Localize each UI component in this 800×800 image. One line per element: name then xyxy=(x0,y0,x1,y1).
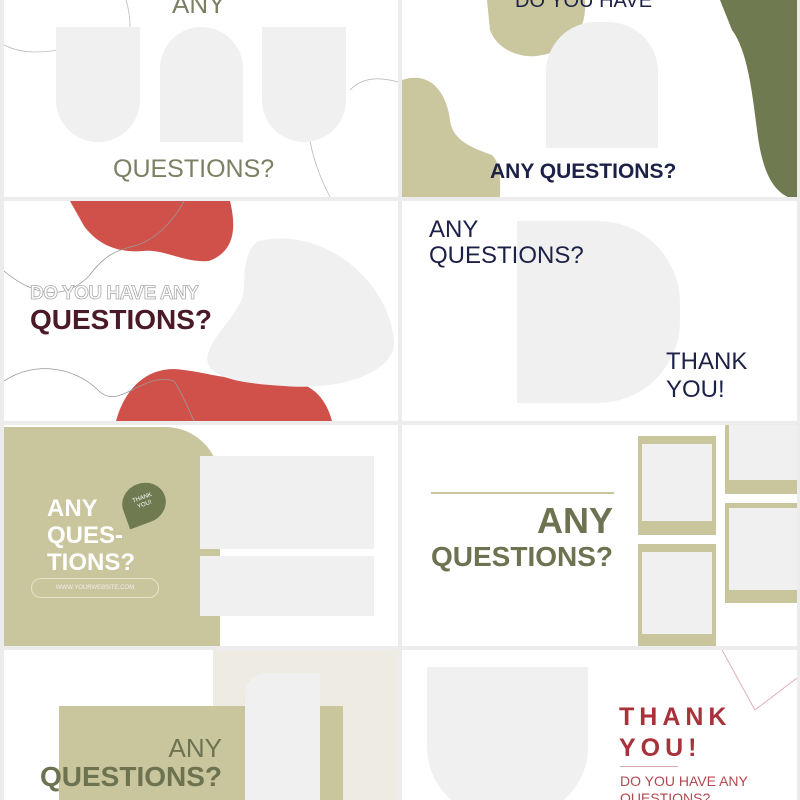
tan block xyxy=(4,427,220,646)
shape: arch xyxy=(245,673,320,800)
blobs xyxy=(402,0,797,197)
badge: THANK YOU!: THANK xyxy=(132,492,153,505)
url pill xyxy=(31,578,159,598)
text: ANY QUESTIONS?: ANY QUESTIONS? xyxy=(490,160,676,183)
panel: slide 8 xyxy=(402,650,797,800)
panel: slide 2 xyxy=(402,0,797,197)
text: THANK YOU!: YOU! xyxy=(619,734,702,762)
shape: left U xyxy=(56,27,140,142)
text: ANY QUESTIONS?: ANY xyxy=(429,216,478,243)
text: ANY: ANY xyxy=(537,500,613,541)
text: THANK YOU! xyxy=(666,348,747,403)
panel: slide 4 xyxy=(402,201,797,421)
text: ANY QUES-TIONS?: TIONS? xyxy=(47,549,135,576)
badge: THANK YOU!: YOU! xyxy=(137,500,153,510)
text: THANK YOU!: THANK xyxy=(619,703,732,731)
panel: slide 5 xyxy=(4,425,398,646)
panel: slide 7 xyxy=(4,650,398,800)
text: DO YOU HAVE ANY QUESTIONS? xyxy=(620,773,748,800)
shape: middle arch xyxy=(160,27,243,142)
photo placeholders xyxy=(200,456,374,549)
badge: THANK YOU! xyxy=(116,477,172,529)
shape: D xyxy=(517,221,680,403)
frames xyxy=(638,436,716,535)
panel: slide 1 xyxy=(4,0,398,197)
text: DO YOU HAVE ANY QUESTIONS?: DO YOU HAVE ANY xyxy=(620,773,748,789)
text: QUESTIONS?: QUESTIONS? xyxy=(30,304,212,335)
divider with dots xyxy=(431,492,614,494)
shape: arch xyxy=(546,22,658,148)
decorative curves xyxy=(4,0,398,197)
text: ANY QUES-TIONS?: QUES- xyxy=(47,522,123,549)
text: QUESTIONS?: QUESTIONS? xyxy=(40,761,222,792)
text: THANK YOU!: THANK xyxy=(666,348,747,375)
panel: slide 3 xyxy=(4,201,398,421)
text: ANY QUES-TIONS? xyxy=(47,495,135,576)
shape: right U xyxy=(262,27,346,142)
text: THANK YOU!: YOU! xyxy=(666,376,725,403)
blobs xyxy=(4,201,394,421)
text: ANY QUESTIONS?: QUESTIONS? xyxy=(429,242,584,269)
text: ANY QUESTIONS? xyxy=(429,216,584,269)
text: QUESTIONS?: QUESTIONS? xyxy=(113,155,274,183)
text: QUESTIONS?: QUESTIONS? xyxy=(431,541,613,572)
shape: U xyxy=(427,667,588,800)
text: ANY: ANY xyxy=(169,733,222,763)
text: THANK YOU! xyxy=(619,703,732,762)
text: ANY QUES-TIONS?: ANY xyxy=(47,495,98,522)
url pill: WWW.YOURWEBSITE.COM xyxy=(56,585,134,591)
panel: slide 6 xyxy=(402,425,797,646)
text: DO YOU HAVE ANY (outline): DO YOU HAVE ANY xyxy=(30,283,198,304)
